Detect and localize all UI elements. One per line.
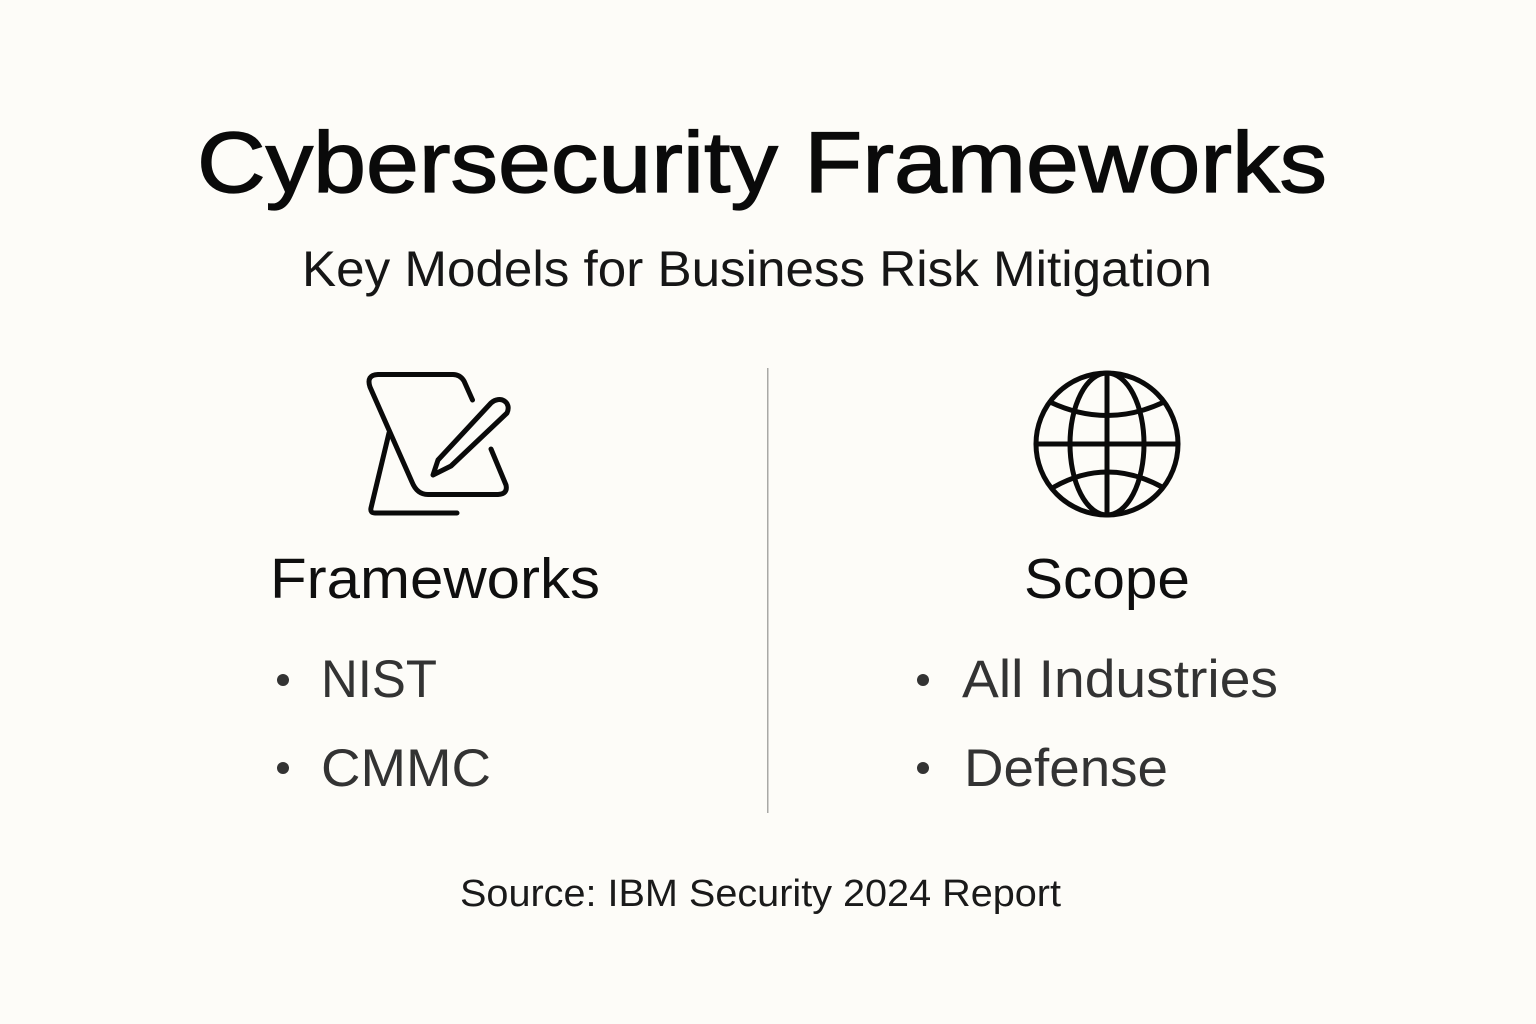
panel: frameworks (270, 374, 600, 798)
icon: notebook and pencil (369, 374, 508, 513)
icon: globe (1036, 373, 1178, 515)
subtitle: Key Models for Business Risk Mitigation (302, 241, 1212, 297)
divider (767, 368, 768, 813)
item: CMMC: CMMC (321, 739, 491, 798)
bullet (277, 674, 289, 686)
list: frameworks (277, 650, 491, 798)
bullet (277, 762, 289, 774)
item: all industries: All Industries (962, 650, 1278, 709)
bullet (917, 674, 929, 686)
list: scope (917, 650, 1278, 798)
title: Cybersecurity Frameworks (197, 115, 1327, 211)
bullet (917, 762, 929, 774)
source note: Source: IBM Security 2024 Report (460, 873, 1061, 915)
heading: frameworks: Frameworks (270, 547, 600, 611)
heading: scope: Scope (1024, 547, 1190, 611)
item: defense: Defense (964, 739, 1168, 798)
panel: scope (917, 373, 1278, 798)
item: NIST: NIST (321, 650, 437, 709)
